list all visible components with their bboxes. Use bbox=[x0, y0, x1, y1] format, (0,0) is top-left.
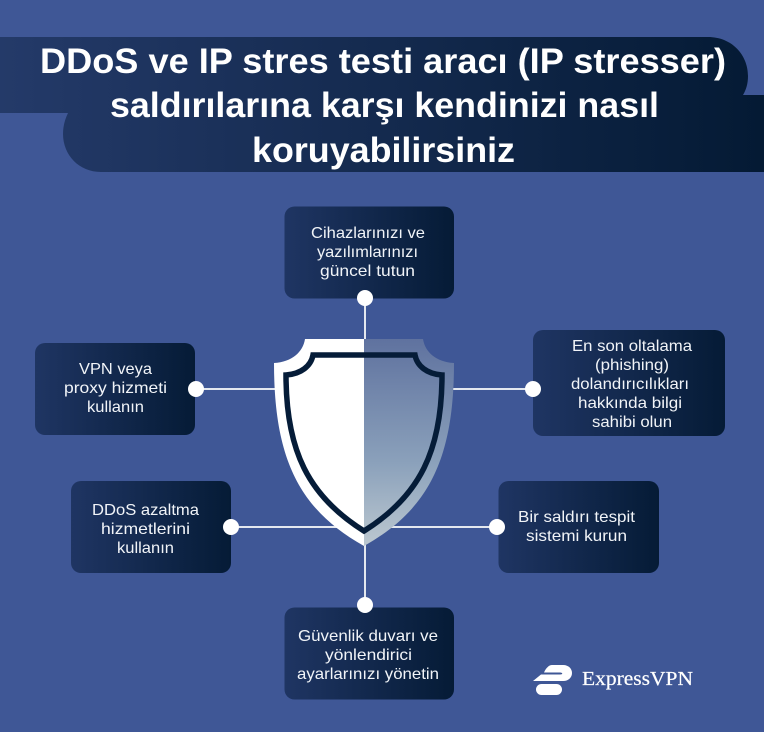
panel: DDoS mitigation bbox=[71, 481, 231, 573]
panel: firewall and router: Güvenlik duvarı ve bbox=[298, 628, 438, 645]
title: saldırılarına karşı kendinizi nasıl bbox=[110, 85, 659, 125]
connector lines bbox=[195, 298, 533, 605]
connector dots bbox=[188, 290, 541, 613]
panel: update devices: yazılımlarınızı bbox=[317, 244, 418, 261]
panel: detection system: sistemi kurun bbox=[526, 528, 627, 545]
panel: phishing awareness: (phishing) bbox=[595, 357, 669, 374]
panel: phishing awareness: En son oltalama bbox=[572, 338, 692, 355]
title: koruyabilirsiniz bbox=[252, 130, 515, 170]
icon: shield bbox=[274, 339, 454, 546]
logo: ExpressVPN bbox=[533, 665, 693, 695]
panel: DDoS mitigation: kullanın bbox=[117, 540, 174, 557]
title banner bbox=[0, 37, 764, 172]
panel: detection system: Bir saldırı tespit bbox=[518, 509, 636, 526]
panel: update devices: güncel tutun bbox=[320, 263, 415, 280]
title: DDoS ve IP stres testi aracı (IP stresser) bbox=[40, 41, 726, 81]
title bbox=[40, 41, 726, 170]
panel: firewall and router bbox=[284, 608, 454, 700]
panel: DDoS mitigation: DDoS azaltma bbox=[92, 502, 199, 519]
panel: phishing awareness: hakkında bilgi bbox=[578, 395, 682, 412]
panel: VPN or proxy bbox=[35, 343, 195, 435]
panel: phishing awareness: dolandırıcılıkları bbox=[571, 376, 689, 393]
panel: detection system bbox=[498, 481, 659, 573]
icon: logo mark bbox=[533, 665, 572, 695]
panel: phishing awareness: sahibi olun bbox=[592, 414, 672, 431]
panel: DDoS mitigation: hizmetlerini bbox=[101, 521, 190, 538]
logo: ExpressVPN: ExpressVPN bbox=[582, 669, 693, 690]
panel: VPN or proxy: kullanın bbox=[87, 399, 144, 416]
panel: firewall and router: yönlendirici bbox=[325, 647, 412, 664]
panel: VPN or proxy: proxy hizmeti bbox=[64, 380, 167, 397]
panel: update devices: Cihazlarınızı ve bbox=[311, 225, 425, 242]
panel: phishing awareness bbox=[533, 330, 725, 436]
panel: firewall and router: ayarlarınızı yönetin bbox=[297, 666, 439, 683]
panel: update devices bbox=[284, 206, 454, 298]
panel: VPN or proxy: VPN veya bbox=[79, 361, 152, 378]
